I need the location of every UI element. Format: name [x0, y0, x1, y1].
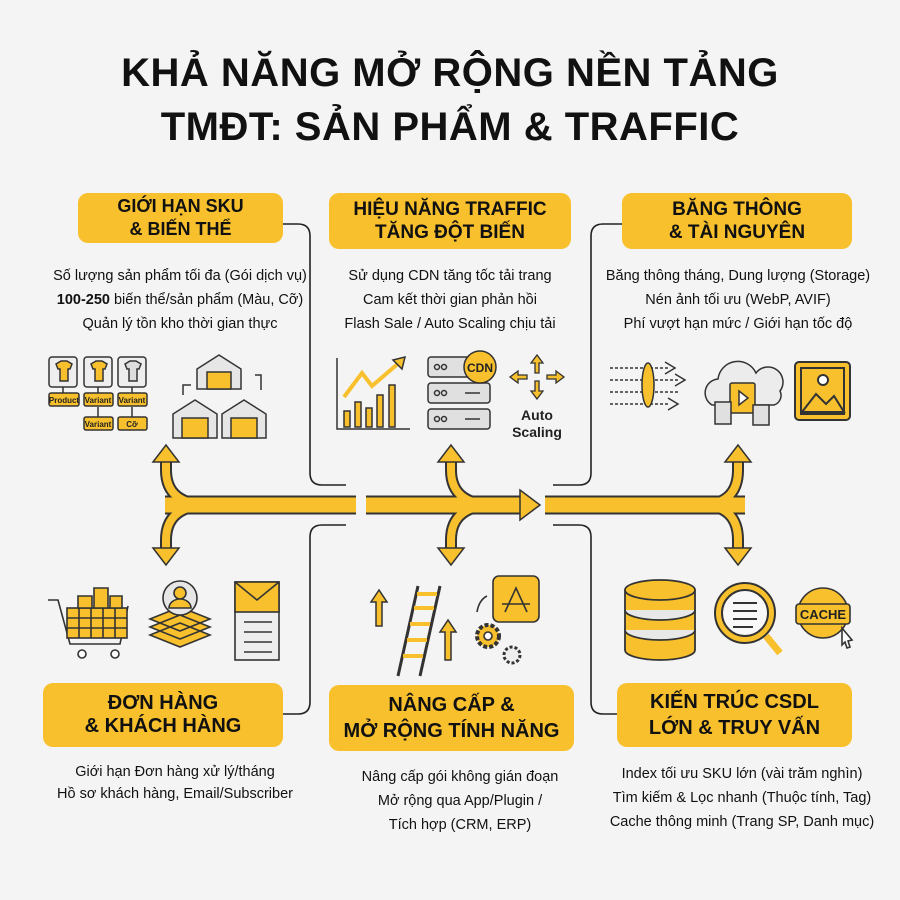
text: SKU limits: Số lượng sản phẩm tối đa (Gói dịch vụ) [53, 268, 307, 284]
pill: traffic performance: HIỆU NĂNG TRAFFIC [353, 199, 547, 220]
text: upgrades [362, 769, 558, 833]
text: bandwidth: Nén ảnh tối ưu (WebP, AVIF) [645, 292, 831, 308]
icon: cache globe [796, 588, 852, 648]
arrows network [153, 445, 751, 565]
connectors and arrows: Product [49, 396, 79, 405]
icon: app store and gears [477, 576, 539, 663]
icon: cart [48, 588, 128, 658]
connectors and arrows: CDN [467, 361, 493, 375]
text: upgrades: Mở rộng qua App/Plugin / [378, 793, 542, 809]
title [121, 50, 779, 149]
text: traffic performance [344, 268, 556, 332]
pill: traffic performance: TĂNG ĐỘT BIẾN [375, 222, 525, 243]
text: upgrades: Tích hợp (CRM, ERP) [389, 817, 531, 833]
pill: upgrades: NÂNG CẤP & [388, 694, 515, 716]
title: KHẢ NĂNG MỞ RỘNG NỀN TẢNG [121, 51, 779, 95]
connectors and arrows: Cỡ [126, 420, 138, 429]
connectors and arrows: Variant [85, 396, 112, 405]
text: traffic performance: Sử dụng CDN tăng tốc tải trang [348, 268, 552, 284]
pill: SKU limits [78, 193, 283, 243]
text: database: Cache thông minh (Trang SP, Danh mục) [610, 814, 874, 830]
text: bandwidth: Phí vượt hạn mức / Giới hạn tốc độ [624, 316, 852, 332]
connectors and arrows: Variant [119, 396, 146, 405]
text: SKU limits: Quản lý tồn kho thời gian thực [83, 316, 277, 332]
text: database: Tìm kiếm & Lọc nhanh (Thuộc tính, Tag) [613, 790, 871, 806]
text: orders: Giới hạn Đơn hàng xử lý/tháng [75, 764, 275, 780]
icon: ladder and arrows [371, 586, 456, 676]
icon: CDN servers [428, 351, 496, 429]
icon: auto scaling [510, 355, 564, 399]
text: orders: Hồ sơ khách hàng, Email/Subscriber [57, 786, 293, 802]
pill: bandwidth: & TÀI NGUYÊN [669, 222, 805, 243]
icon: email list [235, 582, 279, 660]
text: traffic performance: Flash Sale / Auto Scaling chịu tải [344, 316, 556, 332]
pill: orders: & KHÁCH HÀNG [85, 715, 241, 737]
text: database: Index tối ưu SKU lớn (vài trăm nghìn) [622, 766, 862, 782]
text: bandwidth: Băng thông tháng, Dung lượng (Storage) [606, 268, 870, 284]
text: SKU limits [53, 268, 307, 332]
pill: upgrades: MỞ RỘNG TÍNH NĂNG [344, 720, 559, 742]
icon: database [625, 580, 695, 660]
connectors and arrows: Variant [85, 420, 112, 429]
icon: image [795, 362, 850, 420]
icon: compression arrows [610, 362, 685, 410]
icon: product variants [49, 357, 147, 430]
connectors and arrows: CACHE [800, 607, 846, 622]
icon: search magnifier [715, 583, 780, 653]
pill: upgrades [329, 685, 574, 751]
pill: bandwidth [622, 193, 852, 249]
pill: orders [43, 683, 283, 747]
pill: traffic performance [329, 193, 571, 249]
text: database [610, 766, 874, 830]
connectors and arrows: Auto [521, 407, 553, 423]
icon: cloud media [705, 361, 783, 425]
connectors and arrows: Scaling [512, 424, 562, 440]
pill: SKU limits: & BIẾN THỂ [129, 219, 232, 239]
text: upgrades: Nâng cấp gói không gián đoạn [362, 769, 558, 785]
icon: growth chart [337, 357, 410, 429]
pill: database: KIẾN TRÚC CSDL [650, 691, 819, 713]
pill: orders: ĐƠN HÀNG [108, 692, 218, 714]
pill: bandwidth: BĂNG THÔNG [672, 199, 802, 220]
icon: warehouses [173, 355, 266, 438]
pill: database: LỚN & TRUY VẤN [649, 717, 820, 739]
icon: customer profiles [150, 581, 210, 647]
title: TMĐT: SẢN PHẨM & TRAFFIC [161, 105, 739, 149]
pill: SKU limits: GIỚI HẠN SKU [117, 196, 244, 216]
text: traffic performance: Cam kết thời gian phản hồi [363, 292, 537, 308]
text: orders [57, 764, 293, 802]
pill: database [617, 683, 852, 747]
text: SKU limits: 100-250 biến thể/sản phẩm (Màu, Cỡ) [57, 292, 303, 308]
text: bandwidth [606, 268, 870, 332]
